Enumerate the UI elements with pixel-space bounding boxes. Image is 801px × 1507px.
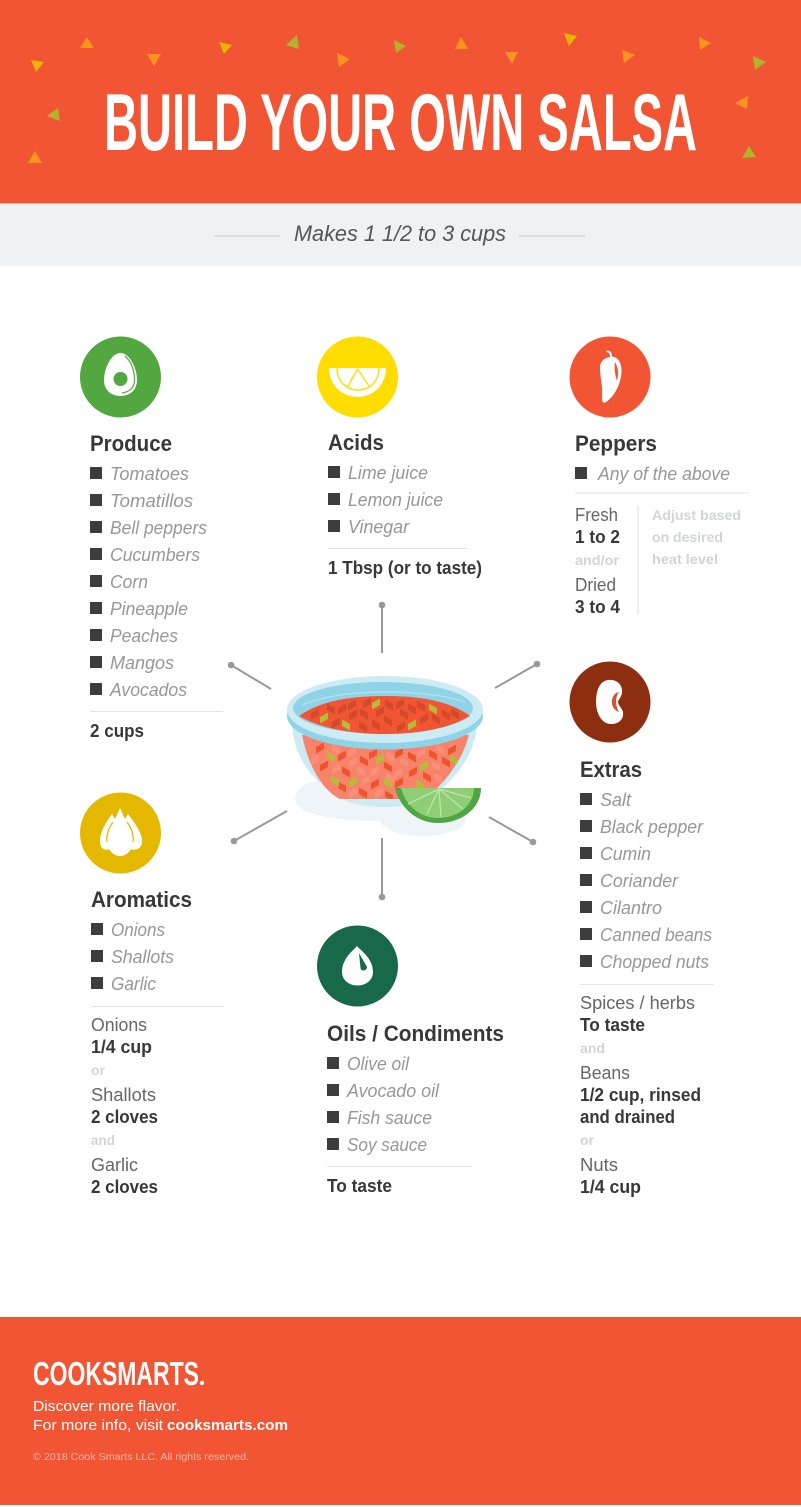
ingredient list: produce: Peaches [110,626,178,646]
ingredient list: aromatics: Shallots [111,947,174,967]
icon: garlic [80,792,161,874]
amounts: extras: or [580,1132,595,1148]
amounts: peppers: and/or [575,552,620,568]
ingredient list: oils: Avocado oil [346,1081,440,1101]
amount: acids: 1 Tbsp (or to taste) [328,558,482,578]
ingredient list: produce: Cucumbers [110,545,200,565]
ingredient list: produce [90,464,207,700]
bowl rim [287,676,483,750]
bowl shadow [295,780,466,836]
header banner [0,0,801,204]
subtitle band [0,204,801,266]
ingredient list: extras [580,790,712,972]
footer tagline: cooksmarts.com [167,1417,288,1434]
ingredient list: acids: Lemon juice [348,490,443,510]
ingredient list: peppers: Any of the above [597,464,730,484]
amounts: aromatics: Shallots [91,1085,156,1105]
ingredient list: produce: Pineapple [110,599,188,619]
ingredient list: extras: Salt [600,790,632,810]
icon: lemon wedge [317,336,398,418]
footer [0,1317,801,1505]
note: heat level [652,507,741,567]
note: heat level: Adjust based [652,507,741,523]
amounts: aromatics: 1/4 cup [91,1037,152,1057]
ingredient list: oils [327,1054,440,1155]
ingredient list: extras: Chopped nuts [600,952,709,972]
amount: oils: To taste [327,1176,392,1196]
footer tagline [33,1398,288,1434]
amounts: aromatics: 2 cloves [91,1177,158,1197]
panel: oils and condiments [317,926,504,1196]
ingredient list: oils: Soy sauce [347,1135,427,1155]
icon: oil drop [317,926,398,1006]
icon: avocado [80,336,161,418]
salsa in bowl [302,735,469,802]
ingredient list: oils: Fish sauce [347,1108,432,1128]
heading: peppers: Peppers [575,431,657,456]
amounts: aromatics: Onions [91,1015,147,1035]
amounts: extras: and drained [580,1107,675,1127]
ingredient list: extras: Cumin [600,844,651,864]
panel: acids [317,336,482,578]
amounts: extras: Beans [580,1063,630,1083]
heading: produce: Produce [90,431,172,456]
heading: aromatics: Aromatics [91,887,192,912]
amounts: peppers: 3 to 4 [575,597,620,617]
amounts: peppers: Dried [575,575,616,595]
panel: extras [570,662,714,1197]
ingredient list: aromatics: Garlic [111,974,156,994]
logo mark dot [200,1381,204,1385]
amounts: peppers [575,505,620,617]
amounts: aromatics: 2 cloves [91,1107,158,1127]
subtitle band: Makes 1 1/2 to 3 cups [294,221,506,246]
amounts: extras: Spices / herbs [580,993,695,1013]
ingredient list: aromatics: Onions [111,920,165,940]
ingredient list: extras: Cilantro [600,898,662,918]
amounts: aromatics: or [91,1062,106,1078]
amounts: aromatics [91,1015,158,1197]
amounts: peppers: Fresh [575,505,618,525]
amounts: extras: To taste [580,1015,645,1035]
amounts: peppers: 1 to 2 [575,527,620,547]
ingredient list: acids: Vinegar [348,517,410,537]
ingredient list: produce: Tomatoes [110,464,189,484]
ingredient list: oils: Olive oil [347,1054,410,1074]
icon: chili pepper [570,336,650,418]
logo: cooksmarts: COOKSMARTS [33,1355,199,1392]
amounts: extras: 1/2 cup, rinsed [580,1085,701,1105]
footer tagline: Discover more flavor. [33,1398,180,1415]
panel: produce [80,336,223,741]
bowl body [292,725,477,807]
ingredient list: extras: Black pepper [600,817,704,837]
ingredient list: produce: Bell peppers [110,518,207,538]
ingredient list: acids: Lime juice [348,463,428,483]
footer tagline: For more info, visit [33,1417,164,1434]
ingredient list: produce: Mangos [110,653,174,673]
note: heat level: heat level [652,551,718,567]
amount: produce: 2 cups [90,721,144,741]
ingredient list: acids [328,463,443,537]
copyright: © 2018 Cook Smarts LLC. All rights reserved. [33,1451,249,1463]
connector lines [228,602,540,900]
amounts: extras [580,993,701,1197]
ingredient list: extras: Coriander [600,871,679,891]
confetti triangles [28,33,766,163]
heading: acids: Acids [328,430,384,455]
amounts: aromatics: and [91,1132,115,1148]
ingredient list: produce: Corn [110,572,148,592]
heading: extras: Extras [580,757,642,782]
amounts: extras: 1/4 cup [580,1177,641,1197]
salsa surface [299,696,470,734]
ingredient list: extras: Canned beans [600,925,712,945]
amounts: aromatics: Garlic [91,1155,138,1175]
lime wedge [395,788,481,823]
heading: oils and condiments: Oils / Condiments [327,1021,504,1046]
ingredient list: aromatics [91,920,174,994]
ingredient list: produce: Avocados [109,680,187,700]
note: heat level: on desired [652,529,723,545]
illustration: salsa bowl with lime [287,676,483,836]
ingredient list: produce: Tomatillos [110,491,193,511]
panel: peppers [570,336,749,617]
panel: aromatics [80,792,224,1197]
icon: bean [570,662,650,742]
amounts: extras: and [580,1040,605,1056]
amounts: extras: Nuts [580,1155,618,1175]
